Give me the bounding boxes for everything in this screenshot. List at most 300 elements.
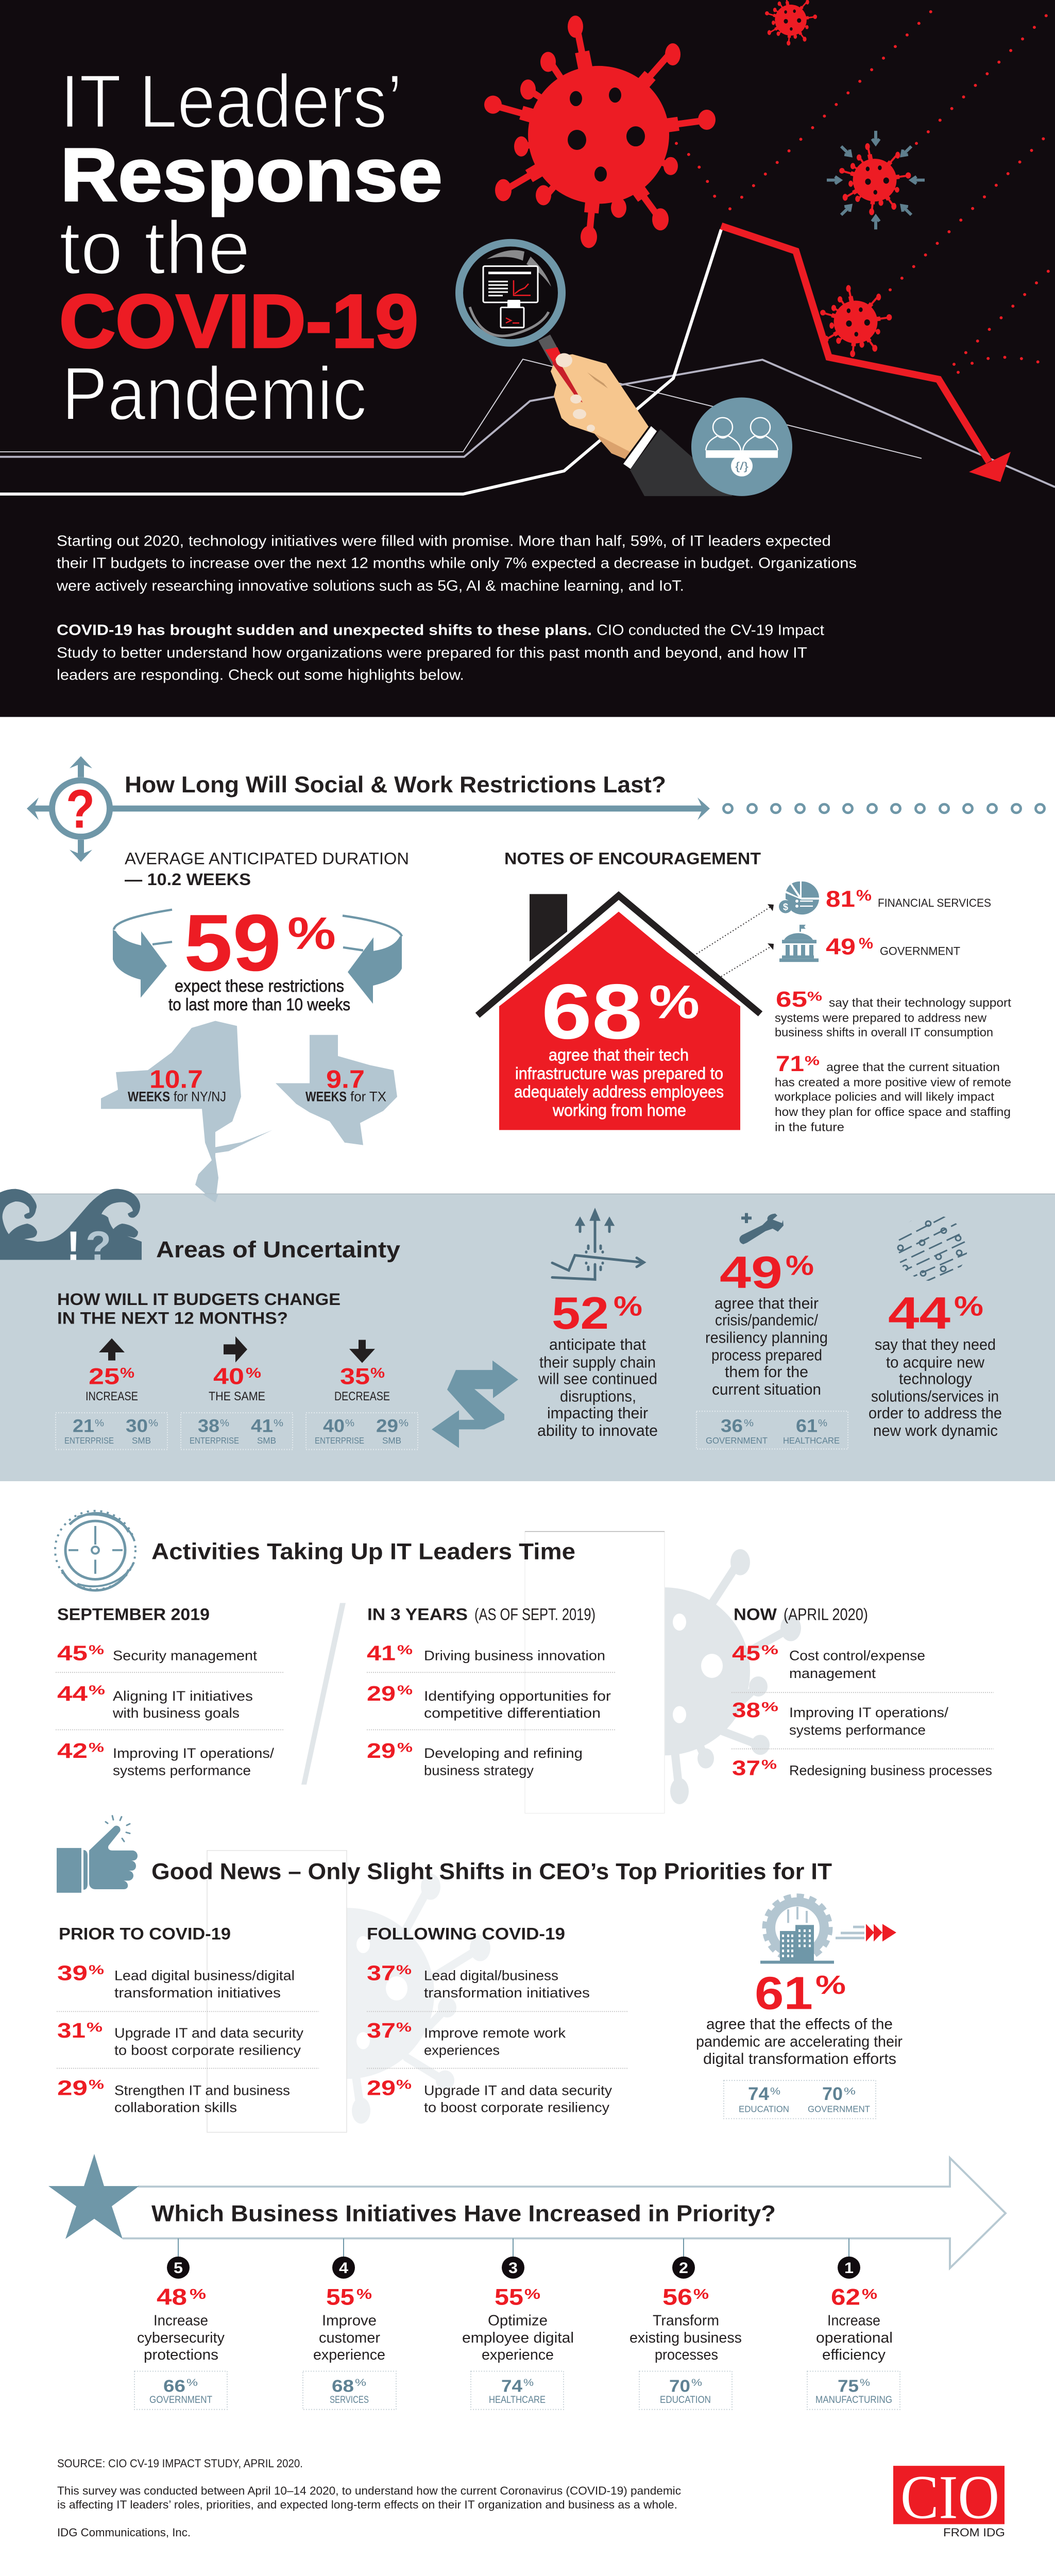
heading: Activities Taking Up IT Leaders Time (151, 1538, 575, 1564)
stat: 44 percent: order to address the (869, 1404, 1002, 1422)
stat: budget decrease: ENTERPRISE (315, 1435, 364, 1446)
column: in 3 years: % (397, 1741, 413, 1755)
stat: 65 percent: systems were prepared to address new (775, 1012, 987, 1025)
icon: question timeline (27, 756, 1045, 862)
icon: house with 68 percent: % (649, 976, 700, 1028)
intro text: Study to better understand how organizations were prepared for this past month and beyond, and how IT (57, 645, 807, 661)
column: now (731, 1605, 994, 1780)
rank 4: % (356, 2286, 372, 2302)
column: september 2019: 42 (57, 1739, 88, 1762)
column: in 3 years: Driving business innovation (424, 1648, 605, 1664)
stat: budget decrease: % (370, 1365, 385, 1381)
rank 3: experience (482, 2347, 554, 2363)
source note: SOURCE: CIO CV-19 IMPACT STUDY, APRIL 2020. (57, 2456, 303, 2470)
rank 4: Improve (322, 2313, 377, 2329)
icon: thumbs up (57, 1816, 138, 1893)
stat: budget increase: % (120, 1365, 134, 1381)
rank 4: 4 (339, 2260, 349, 2277)
stat: 52 percent: impacting their (547, 1404, 648, 1422)
stat: budget the same: 38 (198, 1416, 219, 1436)
stat: budget increase: 25 (89, 1363, 120, 1389)
column: following covid: 37 (367, 2019, 396, 2042)
stat: 61 percent: 70 (822, 2084, 843, 2104)
stat: budget the same (181, 1336, 293, 1449)
stat: 44 percent: new work dynamic (873, 1422, 998, 1439)
subheading: IT budgets (57, 1290, 341, 1327)
stat: 52 percent: anticipate that (549, 1336, 646, 1353)
stat: 61 percent: 61 (755, 1968, 813, 2019)
panel: social and work restrictions (27, 756, 1045, 1202)
column: prior to covid: Upgrade IT and data security (114, 2025, 304, 2041)
stat: 49 percent government: 49 (826, 934, 856, 959)
column: in 3 years: (AS OF SEPT. 2019) (474, 1605, 595, 1623)
stat: 71 percent (774, 1052, 1011, 1134)
rank 1 (807, 2239, 900, 2410)
column: now: NOW (734, 1605, 777, 1623)
rank 3: HEALTHCARE (489, 2394, 546, 2405)
rank 2: processes (655, 2347, 718, 2363)
column: prior to covid: % (89, 1963, 104, 1977)
stat: 59 percent (168, 897, 350, 1014)
stat: 49 percent resiliency: % (744, 1418, 754, 1429)
stat: budget decrease: % (345, 1418, 354, 1429)
stat: 44 percent: 44 (888, 1287, 950, 1338)
column: now: (APRIL 2020) (784, 1605, 868, 1623)
icon: waves: ? (86, 1223, 111, 1269)
stat: 49 percent resiliency: current situation (712, 1381, 821, 1398)
stat: 59 percent: expect these restrictions (175, 977, 344, 996)
column: following covid (367, 1924, 627, 2115)
column: following covid: to boost corporate resiliency (424, 2100, 610, 2115)
icon: virus on trend line (820, 285, 892, 357)
column: in 3 years: 29 (367, 1681, 396, 1705)
rank 2 (629, 2239, 742, 2410)
icon: large virus (484, 15, 716, 248)
rank 3: 74 (501, 2377, 522, 2396)
stat: budget decrease: % (399, 1418, 409, 1429)
subheading: average duration (125, 849, 409, 889)
stat: weeks for TX (305, 1065, 386, 1105)
stat: budget the same: SMB (257, 1435, 276, 1446)
column: following covid: 37 (367, 1961, 396, 1985)
column: prior to covid: collaboration skills (114, 2100, 237, 2115)
column: following covid: Upgrade IT and data security (424, 2083, 612, 2098)
icon: question timeline: ? (66, 778, 95, 839)
rank 5: protections (144, 2347, 218, 2363)
rank 2: Transform (653, 2313, 719, 2329)
column: september 2019: Improving IT operations/ (113, 1745, 275, 1761)
column: prior to covid: 29 (57, 2076, 88, 2099)
column: prior to covid: 39 (57, 1961, 88, 1985)
stat: weeks for NY/NJ: 10.7 (149, 1065, 203, 1093)
rank 1: 62 (831, 2284, 860, 2310)
column: prior to covid: PRIOR TO COVID-19 (59, 1924, 231, 1943)
stat: 52 percent: 52 (552, 1287, 609, 1338)
column: following covid: FOLLOWING COVID-19 (367, 1924, 565, 1943)
rank 4: 55 (326, 2284, 354, 2310)
icon: house with 68 percent: working from home (552, 1100, 686, 1120)
column: september 2019: SEPTEMBER 2019 (57, 1605, 210, 1623)
icon: small virus top (765, 0, 817, 46)
rank 1: % (860, 2377, 870, 2388)
stat: budget decrease (306, 1340, 418, 1449)
column: now: 37 (732, 1756, 760, 1780)
stat: 49 percent resiliency: GOVERNMENT (706, 1435, 768, 1446)
ghost virus watermark (259, 1874, 490, 2124)
column: september 2019: 44 (57, 1681, 88, 1705)
icon: star (48, 2154, 139, 2239)
rank 3: % (524, 2286, 540, 2302)
panel: business initiatives (48, 2154, 1006, 2410)
stat: 71 percent: agree that the current situation (826, 1061, 1000, 1074)
stat: 44 percent (869, 1287, 1002, 1439)
title: Response (60, 133, 443, 217)
stat: budget decrease: 40 (323, 1416, 345, 1436)
rank 4 (303, 2239, 396, 2410)
rank 5: 5 (174, 2260, 183, 2277)
rank 1: % (862, 2286, 877, 2302)
panel: activities taking up time (55, 1511, 994, 1814)
stat: 49 percent resiliency (696, 1247, 848, 1449)
stat: 81 percent financial services: 81 (826, 886, 855, 912)
rank 4: customer (319, 2330, 380, 2346)
icon: house with 68 percent: 68 (541, 968, 642, 1055)
rank 5: Increase (154, 2313, 208, 2329)
stat: budget the same: % (220, 1418, 229, 1429)
column: prior to covid: 31 (57, 2019, 86, 2042)
stat: 49 percent resiliency: 61 (796, 1416, 818, 1436)
column: following covid: % (396, 2021, 412, 2035)
rank 2: EDUCATION (660, 2394, 711, 2405)
column: september 2019: Aligning IT initiatives (113, 1688, 253, 1704)
intro text: were actively researching innovative solutions such as 5G, AI & machine learning, and IoT. (56, 578, 684, 594)
column: following covid: experiences (424, 2043, 500, 2058)
column: prior to covid: % (87, 2021, 103, 2035)
icon: gear with buildings (760, 1896, 864, 1964)
icon: virus with arrows (827, 131, 925, 229)
stat: budget the same: % (246, 1365, 261, 1381)
icon: NY NJ map (101, 1021, 273, 1202)
column: in 3 years: % (397, 1643, 413, 1657)
icon: house with 68 percent (478, 894, 760, 1130)
stat: 61 percent: agree that the effects of the (706, 2016, 893, 2032)
title: to the (59, 206, 250, 290)
rank 2: 2 (679, 2260, 688, 2277)
dotted callout arrows (696, 904, 774, 977)
subheading: IT budgets: IN THE NEXT 12 MONTHS? (57, 1309, 288, 1327)
intro text (56, 533, 857, 683)
rank 2: % (693, 2286, 709, 2302)
stat: 65 percent: % (807, 990, 822, 1004)
column: september 2019: with business goals (112, 1705, 240, 1721)
stat: budget decrease: DECREASE (334, 1389, 390, 1403)
stat: 49 percent resiliency: 49 (720, 1247, 782, 1298)
stat: 61 percent: EDUCATION (739, 2104, 789, 2114)
column: in 3 years (367, 1605, 616, 1778)
rank 2: 56 (662, 2284, 692, 2310)
icon: house with 68 percent: infrastructure was prepared to (515, 1064, 723, 1083)
title (59, 60, 443, 436)
stat: 49 percent government: % (859, 935, 873, 952)
stat: 52 percent: disruptions, (560, 1388, 636, 1405)
icon: supply chain disruption (552, 1211, 644, 1279)
decorative red dots (676, 1, 1054, 372)
column: prior to covid: transformation initiatives (114, 1985, 281, 2001)
column: in 3 years: 41 (367, 1641, 396, 1665)
title: Pandemic (62, 352, 367, 436)
column: in 3 years: IN 3 YEARS (367, 1605, 468, 1623)
rank 3: Optimize (488, 2313, 548, 2329)
panel: hero (0, 0, 1055, 683)
stat: 61 percent: % (844, 2086, 856, 2097)
column: following covid: Lead digital/business (424, 1968, 558, 1984)
icon: red speed arrows (866, 1924, 896, 1942)
rank 2: % (691, 2377, 702, 2388)
stat: 44 percent: solutions/services in (871, 1388, 999, 1405)
stat: 59 percent: 59 (184, 897, 281, 988)
stat: 52 percent: their supply chain (539, 1354, 656, 1371)
icon: outline arrow banner (123, 2158, 1006, 2268)
panel: areas of uncertainty (0, 1189, 1055, 1481)
column: now: Cost control/expense (789, 1648, 925, 1664)
column: prior to covid: Lead digital business/digital (114, 1968, 295, 1984)
stat: 61 percent (696, 1968, 903, 2119)
stat: 61 percent: GOVERNMENT (808, 2104, 870, 2114)
rank 5: % (190, 2286, 206, 2302)
column: in 3 years: 29 (367, 1739, 396, 1762)
column: now: % (761, 1700, 778, 1714)
heading: Good News – Only Slight Shifts in CEO’s Top Priorities for IT (151, 1858, 832, 1884)
stat: 65 percent: say that their technology support (829, 996, 1011, 1010)
column: september 2019 (56, 1605, 284, 1778)
stat: budget increase: ENTERPRISE (64, 1435, 114, 1446)
stat: budget the same: % (274, 1418, 283, 1429)
source note (57, 2456, 681, 2539)
column divider slash (301, 1603, 346, 1785)
rank 5: 66 (163, 2377, 185, 2396)
stat: 49 percent resiliency: 36 (721, 1416, 743, 1436)
rank 2: existing business (629, 2330, 742, 2346)
stat: 71 percent: % (805, 1054, 820, 1068)
icon: Texas map (276, 1035, 397, 1145)
stat: budget the same: ENTERPRISE (190, 1435, 239, 1446)
stat: 49 percent government: GOVERNMENT (880, 944, 960, 957)
column: september 2019: 45 (57, 1641, 88, 1665)
subheading: IT budgets: HOW WILL IT BUDGETS CHANGE (57, 1290, 341, 1309)
stat: 49 percent resiliency: % (818, 1418, 827, 1429)
rank 4: % (355, 2377, 366, 2388)
icon: clock (55, 1511, 135, 1590)
icon: waves (0, 1189, 142, 1269)
stat: 59 percent: % (287, 908, 336, 959)
rank 5: % (186, 2377, 198, 2388)
subheading: average duration: AVERAGE ANTICIPATED DURATION (125, 849, 409, 868)
rank 4: SERVICES (330, 2394, 369, 2405)
stat: budget decrease: 29 (376, 1416, 398, 1436)
icon: magnifying glass (455, 239, 583, 405)
stat: weeks for NY/NJ: for NY/NJ (174, 1089, 226, 1105)
intro text: their IT budgets to increase over the next 12 months while only 7% expected a decrease in budget. Organizations (57, 555, 857, 571)
stat: budget the same: THE SAME (209, 1389, 265, 1403)
stat: budget increase: % (95, 1418, 104, 1429)
column: now: Improving IT operations/ (789, 1705, 949, 1720)
panel: good news priorities (57, 1816, 903, 2132)
column: following covid: transformation initiatives (424, 1985, 590, 2001)
intro text: Starting out 2020, technology initiatives were filled with promise. More than half, 59%, of IT leaders expected (57, 533, 831, 549)
stat: 71 percent: workplace policies and will likely impact (774, 1091, 994, 1104)
rank 3: 55 (495, 2284, 523, 2310)
column: now: % (761, 1643, 778, 1657)
rank 1: efficiency (822, 2347, 886, 2363)
column: september 2019: Security management (113, 1648, 258, 1664)
column: in 3 years: Identifying opportunities for (424, 1688, 611, 1704)
stat: 59 percent: to last more than 10 weeks (168, 995, 350, 1014)
stat: 44 percent: say that they need (875, 1336, 996, 1353)
rank 5: cybersecurity (137, 2330, 225, 2346)
icon: wrench (739, 1213, 784, 1244)
stat: 49 percent resiliency: HEALTHCARE (783, 1435, 840, 1446)
column: following covid: 29 (367, 2076, 396, 2099)
rank 2: 70 (669, 2377, 690, 2396)
stat: budget increase: 30 (126, 1416, 148, 1436)
footer (57, 2456, 1005, 2539)
stat: 61 percent: % (815, 1970, 846, 1999)
stat: 81 percent financial services: % (856, 887, 872, 904)
stat: budget increase: 21 (73, 1416, 94, 1436)
stat: 49 percent resiliency: % (786, 1250, 814, 1281)
column: now: Redesigning business processes (789, 1763, 992, 1778)
rank 3: 3 (508, 2260, 518, 2277)
icon: hand (551, 353, 733, 496)
icon: people and code circle: {/} (735, 460, 748, 472)
icon: swap arrows (432, 1361, 518, 1448)
stat: 49 percent resiliency: agree that their (714, 1295, 819, 1312)
chart: red decline arrow (721, 226, 1011, 482)
rank 5 (134, 2239, 227, 2410)
rank 1: operational (816, 2330, 893, 2346)
column: now: management (789, 1666, 876, 1681)
stat: 49 percent resiliency: resiliency planning (705, 1329, 828, 1346)
stat: 71 percent: 71 (776, 1052, 804, 1076)
stat: 52 percent: % (614, 1291, 642, 1322)
icon: sliders sphere (897, 1216, 967, 1281)
column: in 3 years: business strategy (424, 1763, 534, 1778)
stat: 61 percent: digital transformation efforts (703, 2050, 896, 2067)
CIO logo: CIO (900, 2463, 999, 2532)
panel: hero background (0, 0, 1055, 717)
stat: budget the same: 40 (213, 1363, 244, 1389)
column: prior to covid (57, 1924, 319, 2115)
stat: 49 percent government (826, 934, 960, 959)
column: in 3 years: competitive differentiation (424, 1705, 601, 1721)
column: september 2019: % (89, 1741, 104, 1755)
title: COVID-19 (59, 279, 418, 363)
rank 3: % (523, 2377, 534, 2388)
icon: finance chart (779, 882, 819, 914)
stat: 71 percent: in the future (775, 1121, 844, 1134)
rank 1: Increase (827, 2313, 880, 2329)
stat: 65 percent: business shifts in overall IT consumption (775, 1026, 993, 1040)
stat: 44 percent: technology (899, 1370, 973, 1387)
heading: Which Business Initiatives Have Increased in Priority? (151, 2200, 776, 2226)
stat: 71 percent: has created a more positive view of remote (775, 1076, 1011, 1089)
column: following covid: % (396, 1963, 412, 1977)
column: following covid: % (396, 2078, 412, 2092)
icon: waves: ! (66, 1223, 80, 1269)
icon: government building (779, 925, 819, 962)
rank 5: GOVERNMENT (149, 2394, 212, 2405)
stat: budget increase: SMB (132, 1435, 151, 1446)
stat: 44 percent: to acquire new (886, 1354, 985, 1371)
column: prior to covid: % (89, 2078, 104, 2092)
stat: budget the same: 41 (251, 1416, 273, 1436)
stat: budget decrease: SMB (382, 1435, 401, 1446)
stat: 71 percent: how they plan for office space and staffing (775, 1106, 1011, 1119)
stat: 81 percent financial services: FINANCIAL SERVICES (878, 896, 991, 909)
stat: budget decrease: 35 (340, 1363, 370, 1389)
intro text: CIO conducted the CV-19 Impact (597, 622, 824, 638)
stat: 65 percent (775, 988, 1011, 1040)
rank 1: MANUFACTURING (815, 2394, 892, 2405)
column: now: 38 (732, 1698, 760, 1722)
rank 4: experience (313, 2347, 385, 2363)
column: in 3 years: Developing and refining (424, 1745, 583, 1761)
ghost virus watermark (578, 1549, 801, 1804)
decorative chart lines (0, 229, 1055, 494)
source note: This survey was conducted between April 10–14 2020, to understand how the current Coronavirus (COVID-19) pandemic (57, 2484, 681, 2497)
heading: Areas of Uncertainty (156, 1236, 401, 1262)
subheading: notes of encouragement: NOTES OF ENCOURAGEMENT (504, 849, 761, 868)
stat: budget increase: INCREASE (86, 1389, 138, 1403)
stat: weeks for TX: for TX (350, 1089, 386, 1105)
stat: budget increase (56, 1338, 167, 1449)
column: prior to covid: Strengthen IT and business (114, 2083, 290, 2098)
source note: IDG Communications, Inc. (57, 2526, 191, 2539)
column: prior to covid: to boost corporate resiliency (114, 2043, 301, 2058)
title: IT Leaders’ (60, 60, 402, 144)
rank 4: 68 (332, 2377, 354, 2396)
stat: 52 percent (537, 1287, 658, 1439)
stat: 49 percent resiliency: them for the (725, 1363, 808, 1381)
subheading: average duration: — 10.2 WEEKS (125, 870, 251, 889)
stat: 52 percent: ability to innovate (537, 1422, 658, 1439)
icon: finance chart: $ (783, 902, 789, 912)
stat: 49 percent resiliency: crisis/pandemic/ (715, 1312, 818, 1329)
icon: circular arrows (113, 910, 402, 1004)
column: now: % (761, 1758, 777, 1772)
heading: How Long Will Social & Work Restrictions Last? (125, 772, 666, 798)
column: september 2019: systems performance (113, 1763, 251, 1778)
column: september 2019: % (89, 1683, 105, 1698)
stat: 49 percent resiliency: process prepared (711, 1347, 822, 1364)
stat: 61 percent: 74 (748, 2084, 769, 2104)
stat: 44 percent: % (954, 1291, 983, 1322)
icon: house with 68 percent: agree that their tech (549, 1045, 689, 1064)
stat: weeks for NY/NJ: WEEKS (128, 1089, 170, 1105)
stat: 61 percent: pandemic are accelerating their (696, 2033, 903, 2050)
rank 3 (462, 2239, 574, 2410)
column: now: 45 (732, 1641, 760, 1665)
stat: 65 percent: 65 (776, 988, 807, 1012)
rank 5: 48 (157, 2284, 187, 2310)
stat: weeks for TX: WEEKS (305, 1089, 347, 1105)
intro text: COVID-19 has brought sudden and unexpected shifts to these plans. (57, 622, 592, 638)
CIO logo: FROM IDG (943, 2526, 1005, 2539)
column: september 2019: % (89, 1643, 104, 1657)
stat: weeks for NY/NJ (128, 1065, 226, 1105)
column: in 3 years: % (397, 1683, 413, 1698)
column: now: systems performance (789, 1722, 926, 1738)
